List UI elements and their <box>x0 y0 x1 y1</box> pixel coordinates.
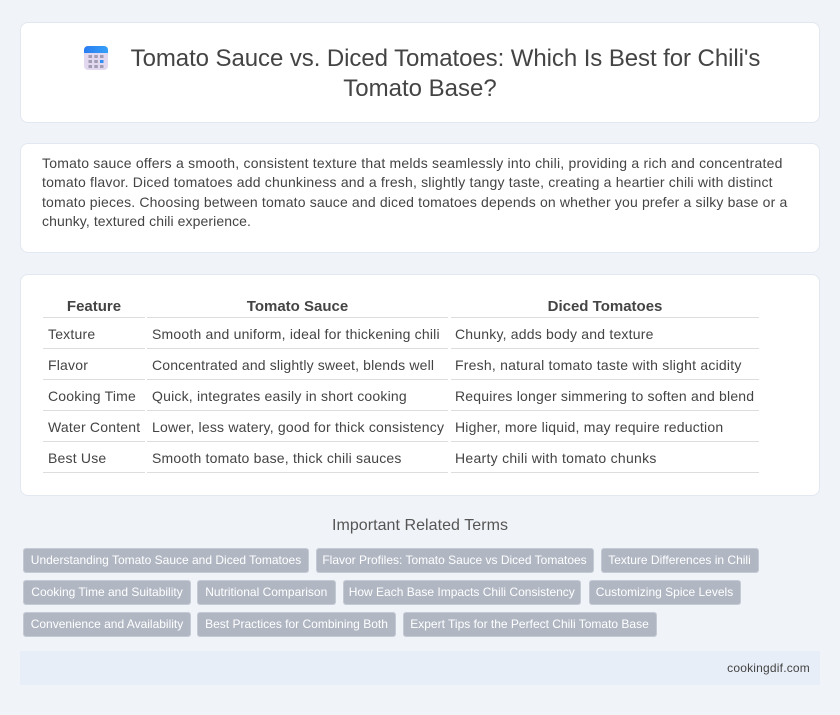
tag: How Each Base Impacts Chili Consistency <box>349 585 575 599</box>
footer bar <box>20 651 820 685</box>
title: Tomato Sauce vs. Diced Tomatoes: Which Is Best for Chili's <box>131 45 760 72</box>
tag <box>316 548 594 573</box>
row: Cooking Time: Cooking Time <box>48 388 136 404</box>
intro paragraph <box>42 155 788 229</box>
column header: Diced Tomatoes: Diced Tomatoes <box>548 298 662 315</box>
intro paragraph: tomato flavor. Diced tomatoes add chunkiness and a fresh, slightly tangy taste, creating a heartier chili with distinct <box>42 174 773 190</box>
row: Flavor: Flavor <box>48 357 88 373</box>
row: Texture <box>48 326 654 342</box>
row: Water Content: Lower, less watery, good for thick consistency <box>152 419 444 435</box>
row: Water Content: Water Content <box>48 419 140 435</box>
tag <box>23 580 191 605</box>
heading: related terms: Important Related Terms <box>332 517 508 534</box>
row: Water Content: Higher, more liquid, may require reduction <box>455 419 723 435</box>
tag: Customizing Spice Levels <box>596 585 733 599</box>
panel: header <box>20 22 820 123</box>
column header: Feature: Feature <box>67 298 121 315</box>
tag: Best Practices for Combining Both <box>205 617 388 631</box>
tag <box>23 548 309 573</box>
tag <box>197 612 396 637</box>
title <box>131 45 760 102</box>
tag <box>588 580 740 605</box>
comparison table <box>43 298 759 473</box>
tag <box>342 580 581 605</box>
tag <box>23 612 191 637</box>
tag: Cooking Time and Suitability <box>31 585 183 599</box>
column header: Tomato Sauce: Tomato Sauce <box>247 298 348 315</box>
tag: Understanding Tomato Sauce and Diced Tomatoes <box>31 553 301 567</box>
row: Best Use: Hearty chili with tomato chunks <box>455 450 657 466</box>
tag: Convenience and Availability <box>31 617 183 631</box>
tags: related terms <box>23 548 759 637</box>
tag: Texture Differences in Chili <box>608 553 751 567</box>
panel: intro text <box>20 143 820 253</box>
tag: Expert Tips for the Perfect Chili Tomato Base <box>410 617 649 631</box>
row: Best Use <box>48 450 657 466</box>
title: Tomato Base? <box>343 75 497 102</box>
row: Cooking Time: Requires longer simmering to soften and blend <box>455 388 754 404</box>
row: Cooking Time: Quick, integrates easily in short cooking <box>152 388 407 404</box>
intro paragraph: chunky, textured chili experience. <box>42 213 251 229</box>
tag <box>402 612 656 637</box>
row: Water Content <box>48 419 723 435</box>
tag: Flavor Profiles: Tomato Sauce vs Diced Tomatoes <box>322 553 587 567</box>
intro paragraph: Tomato sauce offers a smooth, consistent texture that melds seamlessly into chili, providing a rich and concentrated <box>42 155 783 171</box>
tag: Nutritional Comparison <box>205 585 327 599</box>
icon: calendar <box>84 46 108 70</box>
row: Texture: Chunky, adds body and texture <box>455 326 654 342</box>
row: Flavor <box>48 357 742 373</box>
row: Texture: Smooth and uniform, ideal for thickening chili <box>152 326 440 342</box>
panel: comparison table <box>20 274 820 496</box>
row: Flavor: Concentrated and slightly sweet, blends well <box>152 357 434 373</box>
tag <box>197 580 336 605</box>
row: Best Use: Smooth tomato base, thick chili sauces <box>152 450 402 466</box>
row: Cooking Time <box>48 388 754 404</box>
row: Texture: Texture <box>48 326 95 342</box>
intro paragraph: tomato pieces. Choosing between tomato sauce and diced tomatoes depends on whether you prefer a silky base or a <box>42 194 787 210</box>
row: Flavor: Fresh, natural tomato taste with slight acidity <box>455 357 742 373</box>
row: Best Use: Best Use <box>48 450 106 466</box>
footer source: cookingdif.com <box>727 661 810 675</box>
tag <box>600 548 758 573</box>
